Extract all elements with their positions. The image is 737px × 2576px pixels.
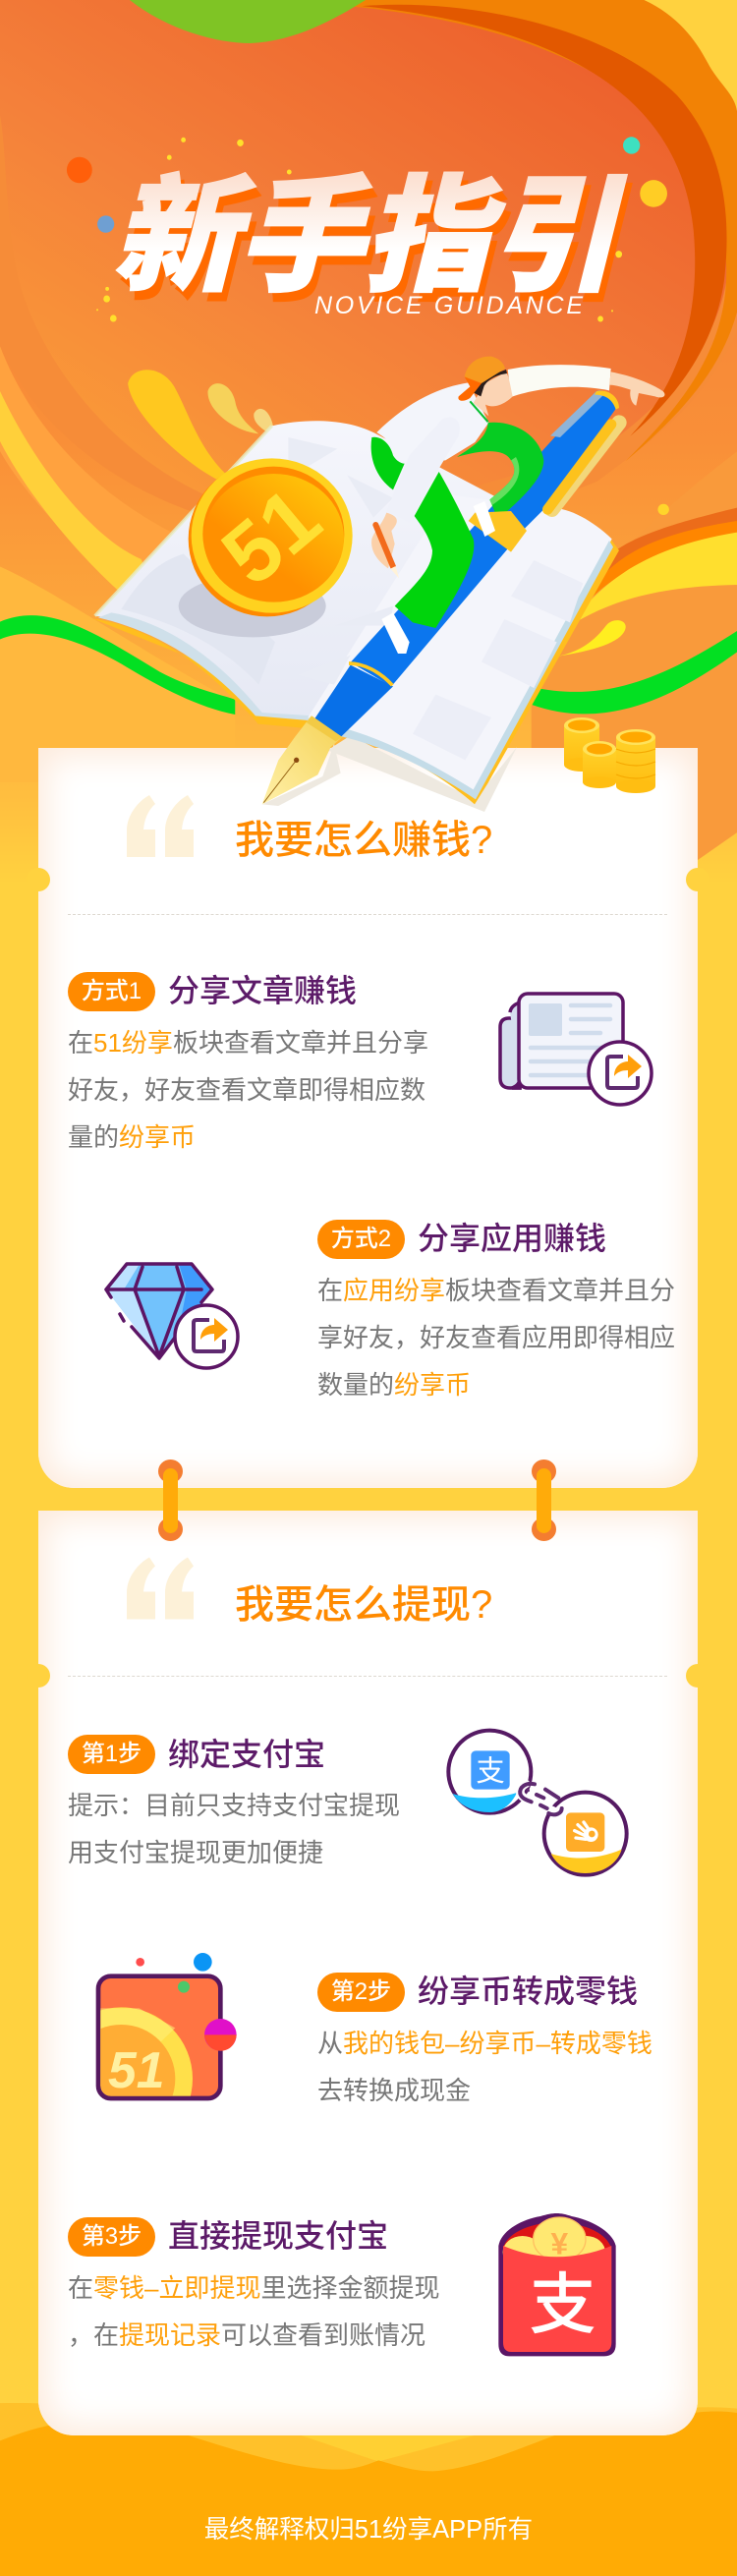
green ribbon <box>0 615 737 715</box>
notch left <box>27 868 50 891</box>
method 1 text <box>68 1028 428 1152</box>
right colour waves <box>553 508 737 657</box>
heading: 我要怎么赚钱? <box>235 819 492 862</box>
icon: diamond share <box>104 1262 240 1370</box>
decorative dots <box>67 137 669 515</box>
method 2 text: 数量的纷享币 <box>317 1370 471 1400</box>
step 3 text: 在零钱–立即提现里选择金额提现 <box>68 2273 440 2303</box>
method 2 text: 在应用纷享板块查看文章并且分 <box>317 1276 675 1305</box>
subtitle: NOVICE GUIDANCE <box>314 292 583 319</box>
step 2 title: 纷享币转成零钱 <box>418 1974 638 2009</box>
coin stacks <box>564 717 655 793</box>
step 1 text <box>68 1791 400 1867</box>
method 2 badge: 方式2 <box>331 1226 391 1252</box>
step 1 text: 用支付宝提现更加便捷 <box>68 1838 323 1867</box>
top green shape <box>130 0 366 43</box>
step 1 title: 绑定支付宝 <box>168 1737 325 1772</box>
icon: newspaper share <box>498 992 653 1107</box>
hero illustration <box>92 356 664 812</box>
coin: 51 <box>204 470 338 603</box>
icon: red envelope <box>498 2213 616 2357</box>
notch right <box>686 868 709 891</box>
method 2 text: 享好友，好友查看应用即得相应 <box>317 1323 675 1352</box>
step 2 text: 去转换成现金 <box>317 2076 471 2105</box>
footer note: 最终解释权归51纷享APP所有 <box>204 2516 533 2544</box>
step 3 title: 直接提现支付宝 <box>168 2218 388 2254</box>
icon: red envelope: 支 <box>529 2267 596 2342</box>
step 3 text: ，在提现记录可以查看到账情况 <box>68 2320 425 2350</box>
step 1 badge: 第1步 <box>82 1741 142 1767</box>
splash drops <box>128 370 273 482</box>
icon: alipay link: 支 <box>476 1755 505 1788</box>
step 3 badge: 第3步 <box>82 2223 142 2250</box>
icon: alipay link <box>446 1728 629 1877</box>
book <box>92 421 619 812</box>
ring: right binder <box>532 1460 556 1541</box>
step 2 badge <box>317 1973 405 2012</box>
method 1 badge <box>68 972 155 1011</box>
icon: app coin card: 51 <box>108 2041 164 2098</box>
step 3 text <box>68 2273 440 2350</box>
title: 新手指引 <box>105 166 644 308</box>
step 1 text: 提示：目前只支持支付宝提现 <box>68 1791 400 1820</box>
coin <box>189 458 353 616</box>
title: 新手指引 <box>110 175 649 316</box>
character <box>371 357 664 654</box>
panel: how to earn <box>38 748 698 1488</box>
method 1 badge: 方式1 <box>82 978 142 1004</box>
method 1 text: 好友，好友查看文章即得相应数 <box>68 1075 425 1105</box>
notch left <box>27 1664 50 1688</box>
step 3 badge <box>68 2217 155 2257</box>
pen <box>262 390 619 804</box>
quote mark <box>127 1557 194 1620</box>
heading: 我要怎么提现? <box>235 1583 492 1627</box>
notch right <box>686 1664 709 1688</box>
icon: app coin card <box>96 1953 237 2101</box>
method 2 badge <box>317 1220 405 1259</box>
step 1 badge <box>68 1735 155 1774</box>
method 2 text <box>317 1276 675 1400</box>
quote mark <box>127 795 194 857</box>
method 1 text: 在51纷享板块查看文章并且分享 <box>68 1028 428 1058</box>
step 2 text <box>317 2029 652 2105</box>
method 1 title: 分享文章赚钱 <box>168 973 357 1008</box>
step 2 text: 从我的钱包–纷享币–转成零钱 <box>317 2029 652 2058</box>
panel: how to withdraw <box>38 1511 698 2435</box>
step 2 badge: 第2步 <box>331 1978 391 2005</box>
footer waves <box>0 2403 737 2576</box>
method 2 title: 分享应用赚钱 <box>418 1221 606 1256</box>
ring: left binder <box>158 1460 183 1541</box>
icon: red envelope: ¥ <box>551 2225 569 2261</box>
method 1 text: 量的纷享币 <box>68 1122 196 1152</box>
